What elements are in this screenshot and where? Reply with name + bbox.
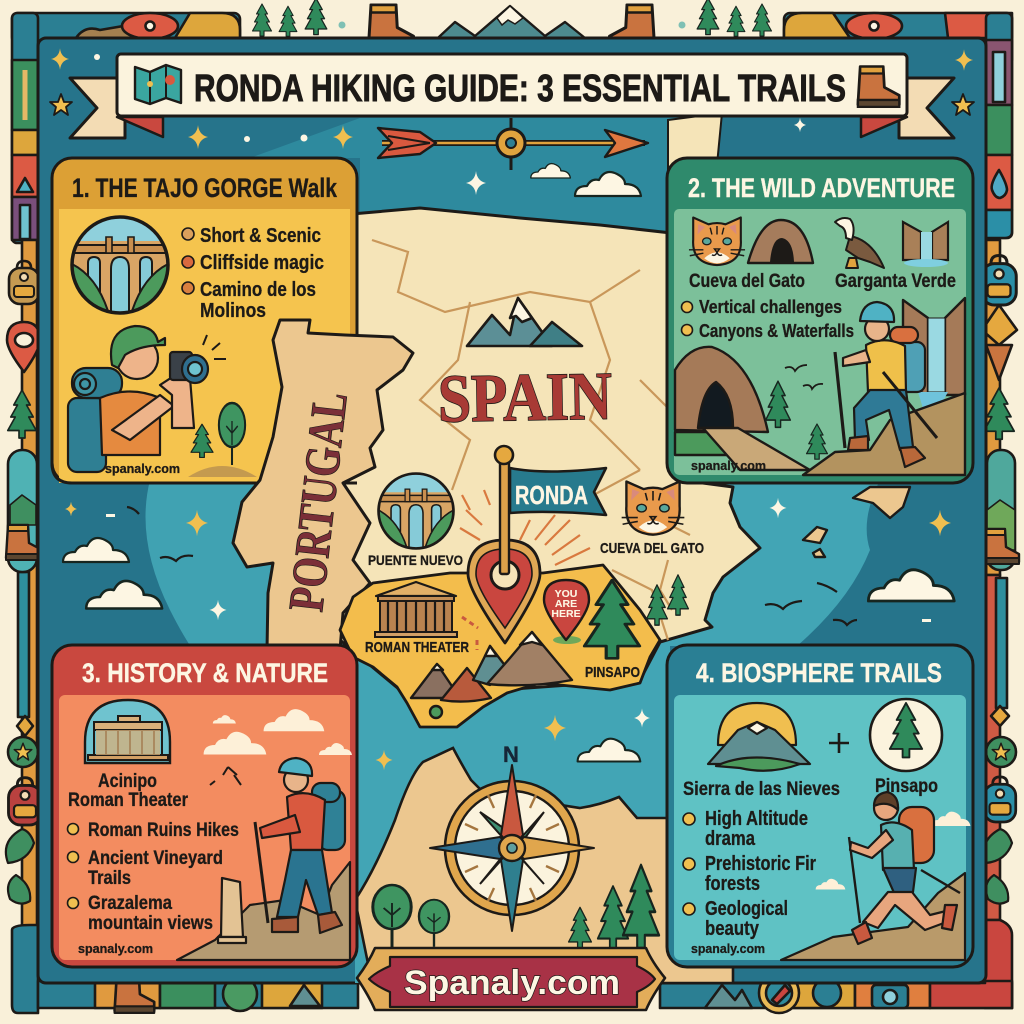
- birds: [785, 365, 823, 389]
- landmark: Roman Theater: ROMAN THEATER: [365, 640, 469, 656]
- bullet list: [182, 225, 324, 322]
- map label: PORTUGAL: PORTUGAL: [277, 389, 358, 614]
- bullet list: Short & Scenic: [200, 225, 321, 247]
- birds: [210, 767, 241, 785]
- small pines on map: [647, 575, 688, 625]
- landmark: Puente Nuevo: PUENTE NUEVO: [368, 552, 463, 568]
- compass rose: [430, 742, 594, 931]
- bullet list: Roman Ruins Hikes: [88, 820, 239, 841]
- watermark: spanaly.com: [691, 941, 765, 956]
- bullet list: forests: [705, 873, 760, 895]
- Ronda location pin and flag: RONDA: [515, 480, 588, 510]
- bullet list: [683, 808, 816, 940]
- Portugal land: [233, 320, 413, 650]
- panel 2: The Wild Adventure: [667, 158, 973, 483]
- Pinsapo tree: [584, 580, 640, 681]
- icon: cave: [748, 220, 813, 263]
- sea sparkles and birds: [50, 48, 974, 770]
- landmark: Roman Theater: [365, 582, 469, 656]
- bullet list: [68, 820, 239, 934]
- north Africa land: [355, 748, 733, 983]
- bullet list: Canyons & Waterfalls: [699, 321, 854, 341]
- bullet list: Cliffside magic: [200, 252, 324, 274]
- Balearic islands: [803, 487, 910, 557]
- bullet list: Prehistoric Fir: [705, 853, 816, 875]
- Ronda location pin and flag: [460, 446, 606, 643]
- You are here pin: HERE: [551, 608, 581, 620]
- bottom strip left: [38, 981, 358, 1008]
- camera flash lines: [203, 335, 226, 359]
- bottom Spanaly.com plaque: [357, 948, 665, 1010]
- landmark: Cueva del Gato cat: [600, 482, 704, 557]
- clouds over sea: [63, 164, 954, 762]
- panel 2: The Wild Adventure: Garganta Verde: [835, 271, 956, 292]
- icon: temple medallion: [85, 700, 170, 763]
- watermark: spanaly.com: [105, 461, 180, 476]
- right ribbon: [899, 78, 954, 138]
- hiker: [835, 302, 937, 467]
- panel 3: History & Nature: [52, 645, 357, 967]
- trees: [219, 403, 245, 465]
- bullet list: Camino de los: [200, 279, 316, 301]
- title banner: [70, 54, 954, 138]
- lighter sea, right: [660, 480, 880, 646]
- icon: Sierra de las Nieves: [708, 703, 810, 771]
- hiker with camera: [68, 326, 208, 472]
- France land: [668, 113, 722, 175]
- regional borders: [372, 240, 690, 640]
- Andalusia region: [340, 565, 660, 727]
- left strip icons: [9, 261, 39, 304]
- bullet list: Vertical challenges: [699, 297, 842, 317]
- title text: RONDA HIKING GUIDE: 3 ESSENTIAL TRAILS: [194, 68, 846, 110]
- heading: 1. THE TAJO GORGE Walk: [72, 173, 338, 203]
- right strip icons: [982, 256, 1016, 305]
- lighter sea, left: [146, 480, 360, 660]
- landmark: Cueva del Gato cat: CUEVA DEL GATO: [600, 541, 704, 557]
- Pinsapo tree: PINSAPO: [585, 664, 640, 681]
- watermark: spanaly.com: [78, 941, 153, 956]
- right strip lower: [986, 240, 1000, 575]
- ground mound: [188, 466, 257, 477]
- hiker and ruins: [177, 758, 350, 960]
- lighter sea, centre: [355, 640, 670, 983]
- left upper strip: [12, 13, 38, 243]
- panel 4: Biosphere Trails: [667, 645, 973, 967]
- bottom Spanaly.com plaque: Spanaly.com: [404, 964, 620, 1002]
- plus sign: [829, 733, 849, 753]
- left lower strip: [22, 240, 37, 930]
- icon: cat: [689, 218, 745, 265]
- map label: SPAIN: SPAIN: [437, 357, 613, 437]
- trees near compass: [373, 865, 659, 948]
- panel 4: Biosphere Trails: Pinsapo: [875, 776, 938, 797]
- bullet list: Ancient Vineyard: [88, 848, 223, 869]
- labels: Acinipo: [98, 771, 157, 792]
- bullet list: Grazalema: [88, 893, 172, 914]
- bullet list: Geological: [705, 898, 788, 920]
- hiker and slope: [781, 792, 965, 960]
- icon: hiking boot: [858, 67, 899, 107]
- lighter sea, top: [250, 118, 680, 235]
- bullet list: [682, 297, 854, 341]
- mountains in Andalusia: [411, 632, 572, 718]
- map: base land: [340, 113, 910, 983]
- Spain land: [340, 208, 760, 690]
- arrow with compass knot: [378, 118, 648, 170]
- bullet list: drama: [705, 828, 756, 850]
- You are here pin: YOU: [555, 588, 577, 600]
- You are here pin: [544, 580, 589, 644]
- heading: 4. BIOSPHERE TRAILS: [696, 658, 942, 688]
- icon: Pinsapo medallion: [870, 699, 942, 771]
- icon: bridge: [70, 217, 170, 313]
- clouds: [816, 812, 970, 890]
- decorative top edge icons: [252, 0, 772, 50]
- clouds: [204, 709, 352, 755]
- landmark: Puente Nuevo: [368, 474, 463, 568]
- icon: eagle: [835, 218, 884, 268]
- labels: Cueva del Gato: [689, 271, 805, 292]
- bullet list: beauty: [705, 918, 760, 940]
- labels: Sierra de las Nieves: [683, 779, 840, 800]
- bullet list: High Altitude: [705, 808, 808, 830]
- bullet list: mountain views: [88, 913, 213, 934]
- panel 1: The Tajo Gorge Walk: [52, 158, 357, 483]
- heading: 2. THE WILD ADVENTURE: [688, 173, 955, 203]
- top-left band: [12, 13, 240, 43]
- icon: folded map: [135, 65, 181, 104]
- title box: [117, 54, 907, 116]
- panel 3: History & Nature: Roman Theater: [68, 790, 189, 811]
- bullet list: Trails: [88, 868, 131, 889]
- heading: 3. HISTORY & NATURE: [82, 658, 328, 688]
- icon: waterfall: [903, 222, 948, 267]
- left ribbon: [70, 78, 125, 138]
- compass rose: N: [503, 742, 519, 767]
- top-right band: [784, 13, 1012, 43]
- watermark: spanaly.com: [691, 458, 766, 473]
- trail dashes: [462, 617, 478, 650]
- right strip upper: [986, 13, 1012, 238]
- You are here pin: ARE: [555, 598, 577, 610]
- cave scene: [675, 298, 965, 475]
- bullet list: Molinos: [200, 300, 266, 322]
- map label: mountain icon: [467, 298, 582, 346]
- bottom strip right: [660, 983, 1012, 1008]
